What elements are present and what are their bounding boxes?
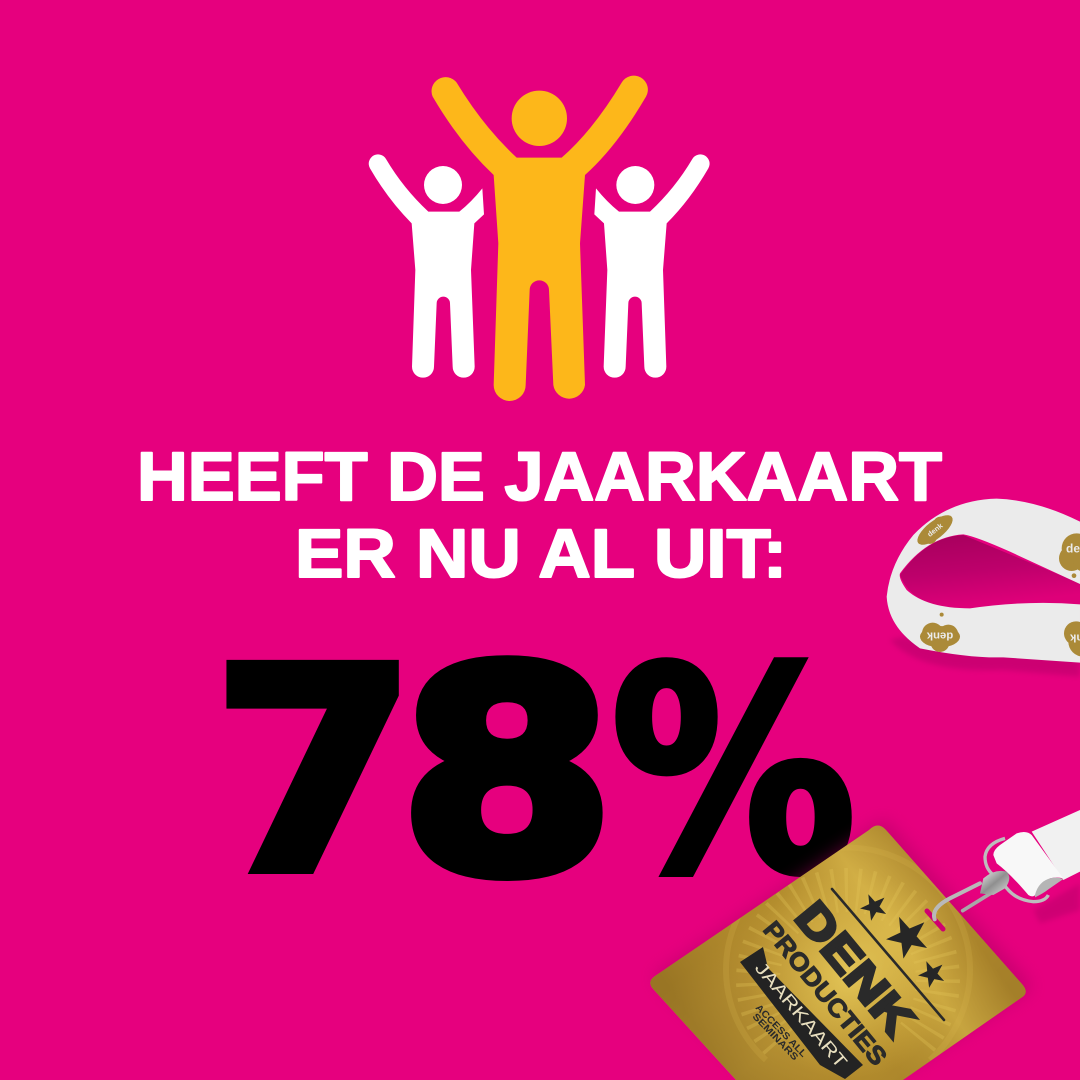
lanyard logo bottom right	[1064, 621, 1080, 657]
big number 78%	[212, 610, 856, 937]
badge rule	[832, 889, 944, 1020]
lanyard logo bottom: denk	[926, 630, 953, 642]
star 3	[915, 955, 951, 991]
icon: right white figure	[594, 154, 710, 378]
icon: central yellow figure	[432, 76, 648, 401]
ring	[985, 838, 1048, 902]
JAARKAART text: JAARKAART	[751, 958, 851, 1072]
lanyard logo bottom	[920, 613, 960, 652]
lanyard band	[887, 499, 1080, 663]
star 2	[881, 907, 938, 964]
PRODUCTIES text: PRODUCTIES	[757, 916, 892, 1071]
strap	[1032, 810, 1080, 880]
JAARKAART banner	[740, 947, 863, 1079]
strap shadow	[1033, 883, 1080, 923]
icon: left white figure	[369, 154, 484, 378]
icon: three cheering people	[369, 76, 710, 401]
hook inner arm	[963, 892, 993, 911]
strap fold inner	[1035, 878, 1063, 897]
heading line 2: ER NU AL UIT:	[295, 515, 787, 592]
star 1	[857, 888, 893, 924]
percent sign: %	[611, 610, 856, 936]
heading line 1: HEEFT DE JAARKAART	[137, 438, 942, 515]
lanyard logo top	[913, 510, 958, 550]
clasp and hook	[934, 871, 1009, 919]
digit 8: 8	[400, 611, 614, 937]
DENK text: DENK	[785, 891, 925, 1046]
gold badge	[650, 826, 1026, 1080]
clasp head	[980, 871, 1009, 895]
lanyard logo right top	[1059, 533, 1080, 578]
hook outer arm	[934, 883, 980, 919]
heading	[137, 438, 942, 592]
lanyard strap loop	[887, 499, 1080, 677]
badge shadow	[655, 820, 1031, 1070]
badge sheen and rays	[650, 826, 1026, 1080]
SEMINARS text: SEMINARS	[750, 1011, 800, 1063]
badge slot	[927, 911, 943, 929]
lanyard logo top: denk	[925, 520, 945, 539]
lanyard inner shade	[900, 535, 1080, 608]
stars	[857, 888, 951, 991]
digit 7: 7	[212, 610, 417, 936]
badge plate	[650, 826, 1026, 1080]
lanyard strap bottom	[985, 810, 1080, 923]
ACCESS ALL text: ACCESS ALL	[753, 1002, 809, 1060]
lanyard shadow	[890, 637, 1080, 677]
strap fold	[993, 832, 1063, 896]
